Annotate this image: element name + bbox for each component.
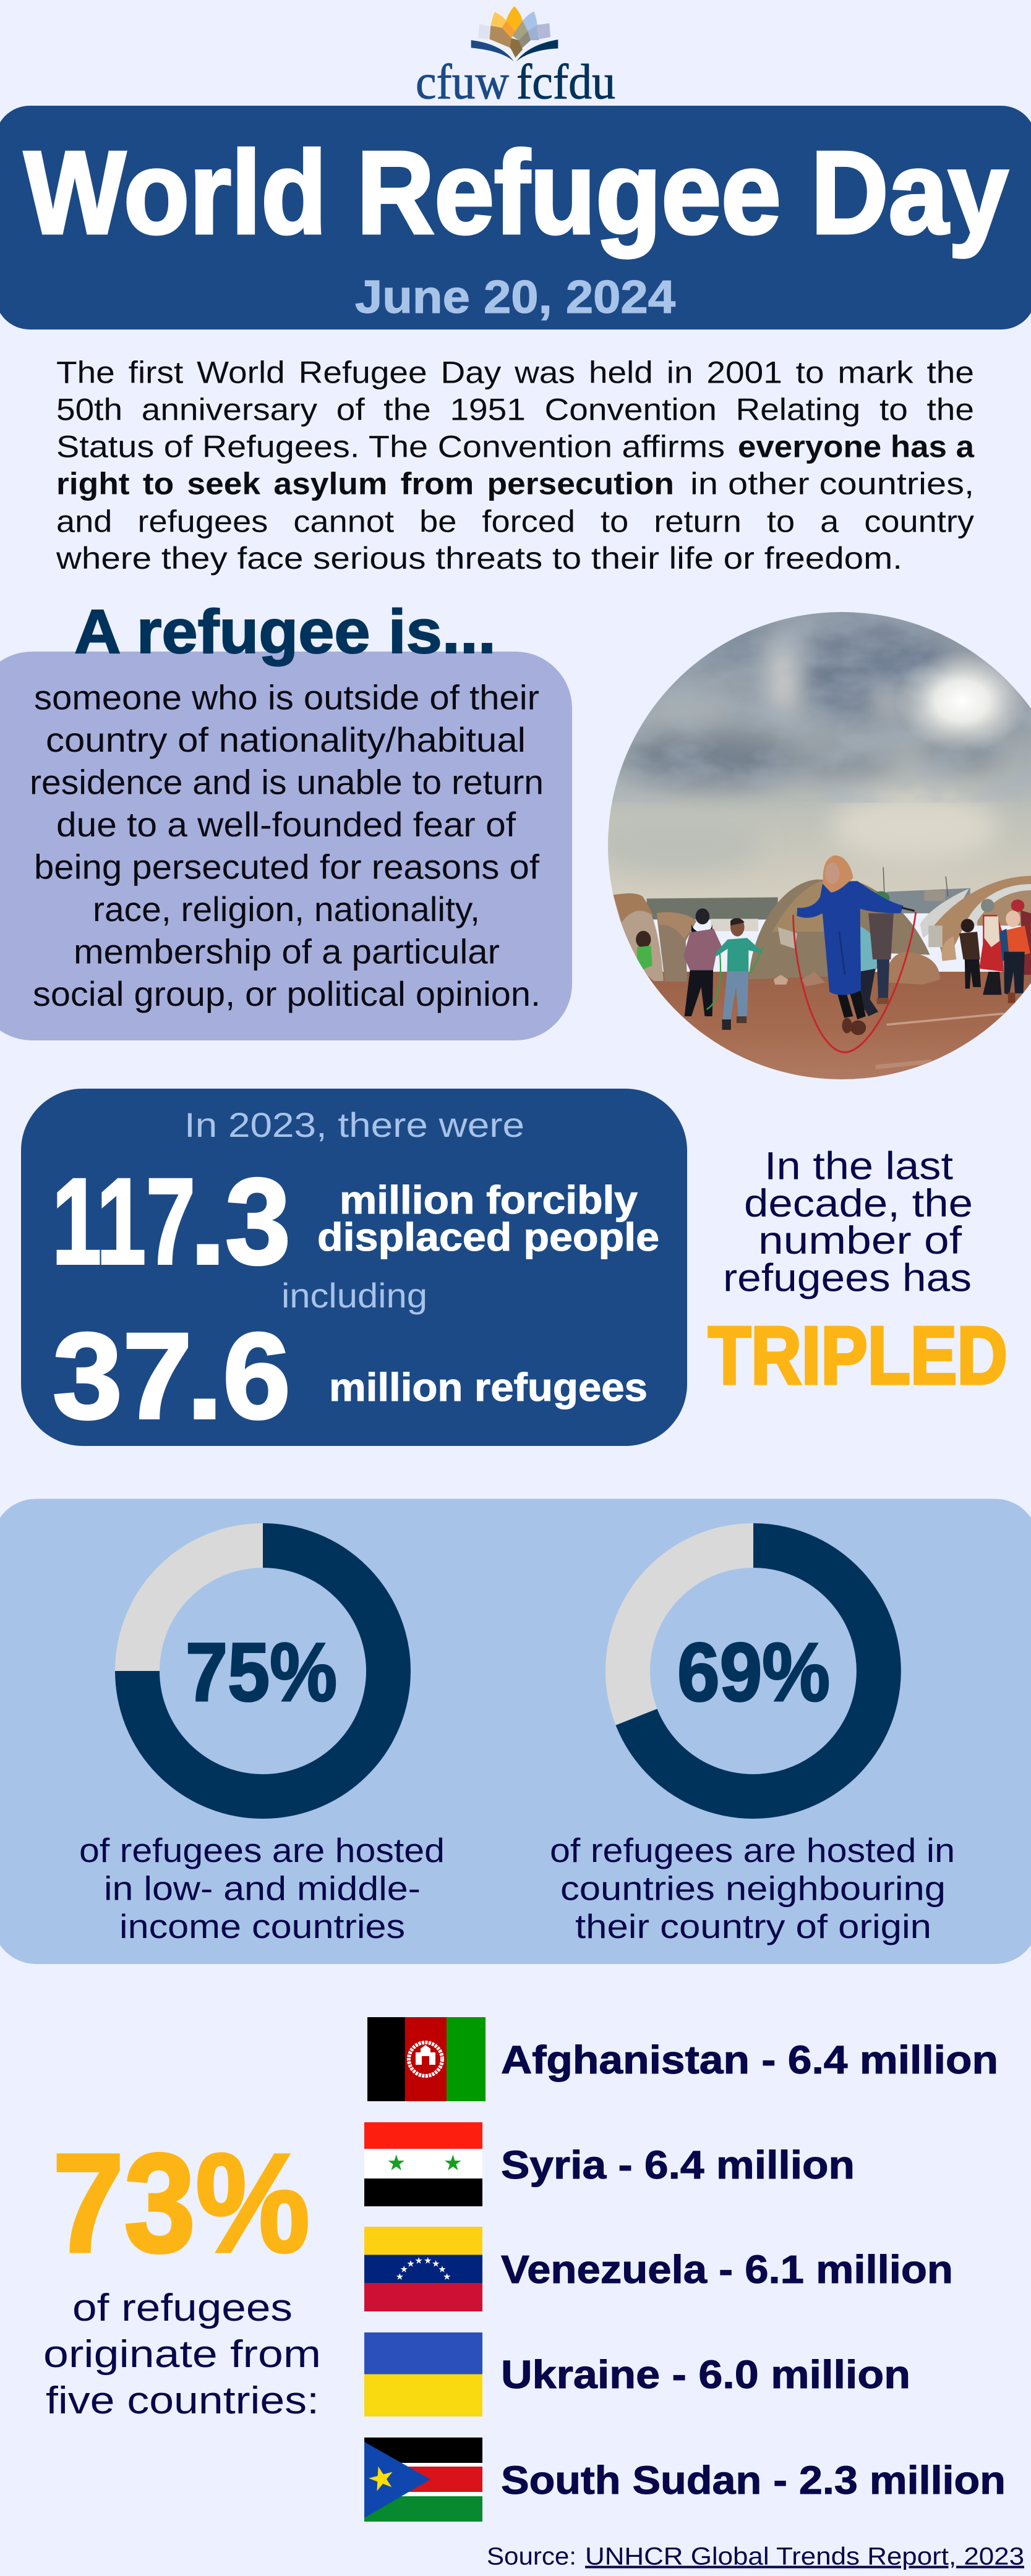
text block: introduction: Status of Refugees. The Convention affirms: [56, 429, 725, 464]
distant hills: [647, 898, 778, 919]
panel: title banner: [0, 106, 1031, 329]
icon: flag of Ukraine: [364, 2332, 482, 2417]
label: Syria: Syria - 6.4 million: [501, 2143, 855, 2187]
number: 117.3: 117: [52, 1153, 195, 1290]
label: million refugees: million refugees: [329, 1365, 648, 1409]
label: million forcibly displaced people: million forcibly: [340, 1178, 638, 1222]
caption: 69%: [550, 1831, 955, 1945]
text block: introduction: 50th anniversary of the 1951 Convention Relating to the: [56, 392, 974, 427]
callout: refugees tripled: [708, 1145, 1007, 1401]
definition text: [30, 678, 544, 1013]
text block: introduction: The first World Refugee Day was held in 2001 to mark the: [56, 355, 974, 389]
source citation: UNHCR Global Trends Report, 2023: [585, 2543, 1024, 2570]
callout: 73 percent of refugees: [43, 2125, 321, 2422]
label: Ukraine: Ukraine - 6.0 million: [501, 2352, 910, 2397]
text block: introduction: [56, 355, 975, 576]
date: June 20, 2024: [355, 271, 675, 323]
icon: flag of Afghanistan: [367, 2017, 486, 2101]
panel: host country donuts: [0, 1498, 1031, 1964]
child in hood: [683, 908, 722, 1016]
text block: introduction: where they face serious threats to their life or freedom.: [56, 541, 902, 576]
ground: [644, 972, 1031, 1079]
logo wordmark: cfuw: [416, 55, 509, 109]
definition text: race, religion, nationality,: [93, 890, 480, 929]
text block: introduction: right to seek asylum from persecution: [56, 466, 674, 501]
icon: flag of Venezuela: [364, 2227, 482, 2311]
number: 37.6: 6: [223, 1307, 291, 1444]
child in teal jacket: [715, 918, 763, 1030]
caption: 69%: their country of origin: [575, 1907, 931, 1945]
definition text: being persecuted for reasons of: [34, 847, 539, 886]
donut chart: 75%: 75%: [186, 1626, 337, 1719]
caption: 69%: of refugees are hosted in: [550, 1831, 955, 1869]
caption: 75%: in low- and middle-: [104, 1869, 421, 1908]
label: Afghanistan: Afghanistan - 6.4 million: [501, 2038, 998, 2082]
callout text: decade, the: [744, 1182, 973, 1225]
number: 37.6: 37: [53, 1307, 192, 1444]
logo: cfuw fcfdu: [416, 6, 615, 109]
rocks: [887, 952, 940, 985]
panel: refugee definition: [0, 597, 572, 1040]
label: million forcibly displaced people: displaced people: [317, 1215, 659, 1259]
caption: five countries: of refugees: [72, 2287, 293, 2329]
caption: five countries: five countries:: [46, 2379, 319, 2422]
caption: five countries: [43, 2287, 321, 2422]
skipping rope: [793, 912, 916, 1052]
callout text: refugees has: [723, 1256, 972, 1299]
caption: 75%: [79, 1831, 445, 1945]
label: million forcibly displaced people: [317, 1178, 659, 1259]
callout text: In the last: [764, 1145, 954, 1188]
number: 37.6: .: [186, 1307, 223, 1444]
caption: 75%: of refugees are hosted: [79, 1831, 445, 1869]
callout text: number of: [758, 1219, 962, 1262]
child in green left: [636, 931, 652, 970]
donut chart: 69%: [628, 1545, 879, 1796]
caption: 69%: countries neighbouring: [560, 1869, 946, 1908]
callout text: [723, 1145, 973, 1299]
donut chart: 69%: 69%: [677, 1626, 830, 1719]
children behind: [857, 891, 894, 1016]
icon: flag of Syria: [364, 2122, 482, 2206]
panel: displacement statistics: [21, 1089, 687, 1446]
number: 37.6: [53, 1307, 291, 1444]
intro line: In 2023, there were: [184, 1105, 524, 1144]
caption: five countries: originate from: [43, 2333, 321, 2376]
tents: [614, 893, 664, 981]
definition text: someone who is outside of their: [34, 678, 539, 717]
photo: children skipping rope in a refugee camp: [594, 606, 1031, 1088]
number: 117.3: 3: [225, 1153, 291, 1290]
caption: 75%: income countries: [119, 1907, 405, 1945]
definition text: residence and is unable to return: [30, 763, 544, 801]
text block: introduction: and refugees cannot be forced to return to a country: [56, 504, 974, 539]
logo wordmark: fcfdu: [516, 55, 615, 109]
text block: introduction: in other countries,: [690, 466, 974, 501]
number: 73%: 73%: [53, 2125, 310, 2282]
definition text: country of nationality/habitual: [46, 720, 526, 759]
definition text: due to a well-founded fear of: [56, 805, 516, 844]
logo wordmark: [416, 55, 615, 109]
definition text: membership of a particular: [74, 932, 500, 971]
label: South Sudan: South Sudan - 2.3 million: [501, 2458, 1006, 2502]
icon: book and petals: [471, 6, 558, 61]
icon: flag of South Sudan: [364, 2438, 482, 2522]
donut chart: 75%: [137, 1545, 388, 1796]
label: Venezuela: Venezuela - 6.1 million: [501, 2247, 953, 2292]
text block: introduction: everyone has a: [738, 429, 975, 464]
girl skipping rope: [797, 856, 904, 1035]
source citation: Source:: [487, 2543, 576, 2570]
heading: a refugee is: A refugee is...: [74, 597, 496, 666]
group of children right: [959, 899, 1031, 1003]
number: 117.3: .: [189, 1153, 226, 1290]
definition text: social group, or political opinion.: [33, 974, 541, 1013]
including: including: [281, 1276, 427, 1315]
